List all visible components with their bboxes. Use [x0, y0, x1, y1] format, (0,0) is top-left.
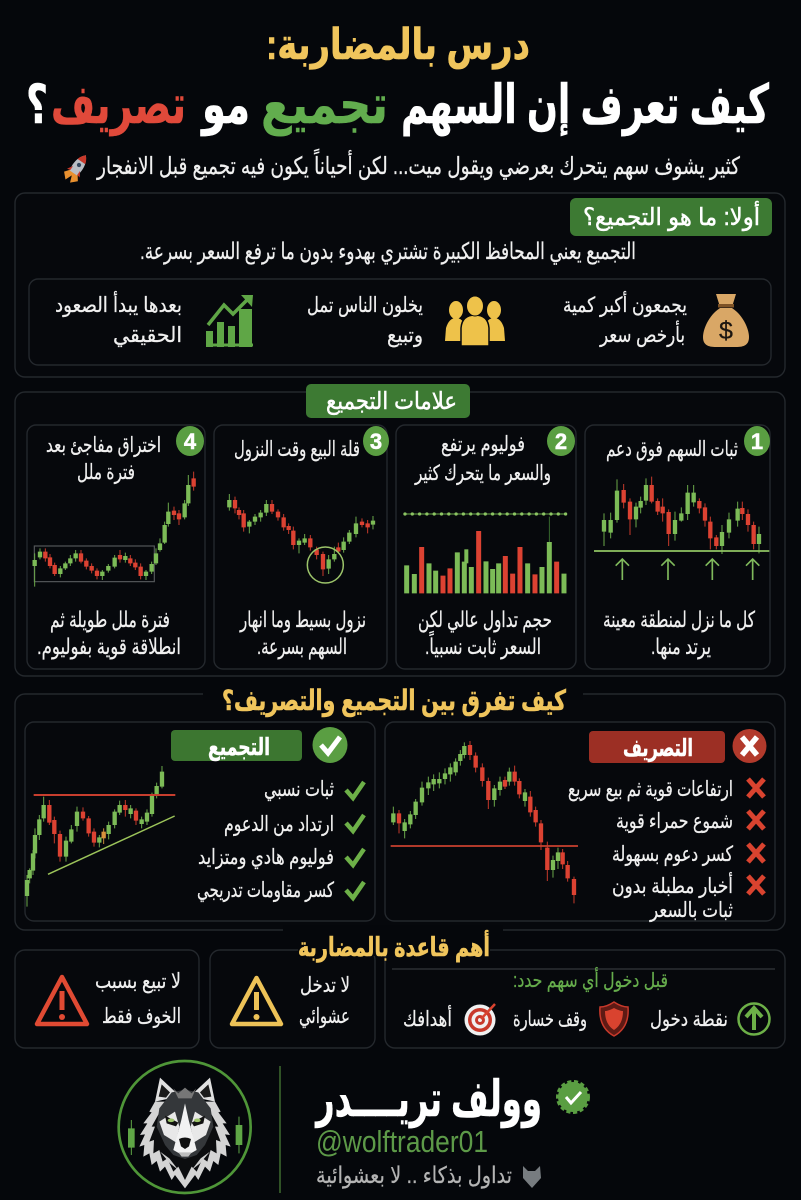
title: main question: تجميع: [261, 75, 388, 136]
number badge 3: [363, 426, 389, 456]
card 3: low selling during decline: [214, 425, 389, 669]
card 1 caption: يرتد منها.: [651, 634, 711, 659]
distribution list: كسر دعوم بسهولة: [612, 843, 733, 866]
card 3 caption: [239, 607, 366, 660]
distribution list: أخبار مطبلة بدون: [612, 872, 733, 898]
number badge 1: 1: [751, 429, 763, 454]
heading pill: signs of accumulation: علامات التجميع: [326, 388, 457, 415]
card 3 heading: قلة البيع وقت النزول: [234, 438, 360, 461]
card 2 caption: [418, 607, 552, 659]
card 3 caption: نزول بسيط وما انهار: [239, 607, 366, 632]
step text: real rise begins: [55, 291, 182, 347]
chart: range then breakout: [34, 472, 194, 587]
card 2: volume rises: [396, 425, 576, 669]
icon: money bag: $: [719, 317, 733, 345]
card 4 heading: [46, 434, 161, 484]
card 1 caption: [603, 607, 755, 659]
label pill: accumulation: التجميع: [208, 734, 270, 761]
label: your targets: أهدافك: [403, 1005, 452, 1031]
chart: accumulation candles: [27, 766, 175, 907]
number badge 1: [744, 426, 770, 456]
icon: shield: [600, 1002, 628, 1036]
chart: volume bars under flat price: [405, 514, 566, 593]
card 2 heading: والسعر ما يتحرك كثير: [414, 462, 551, 485]
icon: green check badge: [312, 727, 348, 763]
distribution list: شموع حمراء قوية: [616, 810, 733, 833]
title: main question: مو: [200, 75, 250, 136]
number badge 3: 3: [370, 429, 382, 454]
card 2 heading: فوليوم يرتفع: [441, 433, 525, 456]
distribution list: ارتفاعات قوية ثم بيع سريع: [568, 778, 733, 802]
text: define before entry: قبل دخول أي سهم حدد:: [513, 967, 668, 993]
title: main question: تصريف: [51, 75, 186, 136]
logo: wolf in circle: [119, 1061, 251, 1193]
sub-panel: distribution: [385, 722, 775, 922]
brand name: وولف تريــــدر: [314, 1071, 542, 1129]
panel: signs of accumulation: [15, 384, 785, 676]
icon: red cross badge: [732, 729, 766, 763]
sub-panel: accumulation: [25, 722, 375, 921]
icon: growth chart: [206, 295, 253, 347]
icon: money bag: [703, 294, 749, 347]
accumulation list: ثبات نسبي: [264, 778, 334, 801]
card: before entering any stock: [385, 950, 785, 1048]
step text: people get bored: وتبيع: [387, 324, 423, 347]
card 4 heading: فترة ملل: [77, 461, 135, 484]
text: do not enter randomly: [299, 974, 350, 1028]
distribution list: ثبات بالسعر: [649, 899, 733, 922]
card 1 heading: ثبات السهم فوق دعم: [606, 438, 738, 462]
icon: up arrow circle: [738, 1004, 770, 1034]
chart: candles on support: [594, 477, 769, 580]
icon: yellow warning: [232, 978, 281, 1024]
label pill: accumulation: [171, 730, 302, 761]
step text: real rise begins: الحقيقي: [113, 324, 182, 347]
step text: collect cheaply: [563, 291, 687, 347]
card: do not enter randomly: [210, 950, 375, 1048]
heading pill: first, what is accumulation: [570, 198, 772, 236]
tagline: تداول بذكاء .. لا بعشوائية: [316, 1162, 512, 1189]
icon: target: [464, 1004, 496, 1036]
label pill: distribution: التصريف: [623, 735, 693, 762]
panel: accumulation versus distribution: [15, 685, 785, 935]
card 4 caption: [37, 607, 181, 659]
icon: rocket: [61, 150, 93, 186]
card 3 caption: السهم بسرعة.: [257, 634, 347, 660]
label pill: distribution: [589, 731, 725, 763]
title: main question: ؟: [26, 75, 48, 135]
text: do not sell from fear: لا تبيع بسبب: [95, 970, 181, 993]
step text: collect cheaply: يجمعون أكبر كمية: [563, 291, 687, 317]
number badge 4: 4: [184, 429, 197, 454]
label: stop loss: وقف خسارة: [513, 1008, 587, 1031]
card 4 caption: فترة ملل طويلة ثم: [50, 607, 170, 633]
step text: people get bored: [307, 294, 423, 347]
card 4: breakout after boredom: [27, 425, 205, 669]
chart: distribution candles: [391, 741, 578, 903]
card 2 caption: السعر ثابت نسبياً.: [425, 630, 541, 659]
icon: small wolf: [523, 1166, 541, 1188]
label: entry point: نقطة دخول: [650, 1008, 728, 1031]
text: do not enter randomly: عشوائي: [299, 1005, 350, 1028]
heading: how to tell the difference: كيف تفرق بين التجميع والتصريف؟: [222, 685, 567, 717]
inner box: three steps: [29, 279, 771, 365]
card 4 caption: انطلاقة قوية بفوليوم.: [37, 634, 181, 659]
heading pill: signs of accumulation: [306, 384, 470, 418]
handle: @wolftrader01: [316, 1124, 488, 1159]
accumulation list: ارتداد من الدعوم: [224, 813, 334, 836]
card: do not sell from fear: [15, 950, 199, 1048]
number badge 2: [547, 426, 575, 456]
card 2 heading: [414, 433, 551, 485]
title: main question: [26, 75, 769, 136]
panel: golden rule cards: [15, 930, 785, 1048]
divider: [279, 1066, 281, 1193]
step text: real rise begins: بعدها يبدأ الصعود: [55, 291, 182, 317]
icon: people: [445, 296, 505, 346]
footer: wolf trader brand: [119, 1061, 588, 1193]
text: do not sell from fear: [95, 970, 181, 1028]
title: lesson label: درس بالمضاربة:: [266, 21, 530, 69]
icon: verified badge: [558, 1082, 588, 1112]
distribution list: [568, 778, 764, 922]
step text: people get bored: يخلون الناس تمل: [307, 294, 423, 317]
icon: red warning: [37, 977, 87, 1024]
heading pill: first, what is accumulation: أولا: ما هو التجميع؟: [583, 201, 760, 231]
accumulation list: [197, 778, 364, 902]
step text: collect cheaply: بأرخص سعر: [599, 320, 685, 347]
panel: what is accumulation: [15, 193, 785, 377]
accumulation list: كسر مقاومات تدريجي: [197, 879, 334, 902]
card 1: price steady above support: [585, 425, 770, 669]
number badge 2: 2: [555, 429, 567, 454]
text: do not sell from fear: الخوف فقط: [102, 1005, 181, 1028]
card 2 caption: حجم تداول عالي لكن: [418, 607, 552, 633]
card 4 heading: اختراق مفاجئ بعد: [46, 434, 161, 457]
chart: gentle decline with circle: [229, 494, 373, 583]
number badge 4: [176, 426, 204, 456]
accumulation list: فوليوم هادي ومتزايد: [198, 846, 334, 869]
heading: most important rule: أهم قاعدة بالمضاربة: [298, 930, 490, 962]
definition text: التجميع يعني المحافظ الكبيرة تشتري بهدوء بدون ما ترفع السعر بسرعة.: [140, 238, 636, 265]
text: do not enter randomly: لا تدخل: [300, 974, 350, 997]
